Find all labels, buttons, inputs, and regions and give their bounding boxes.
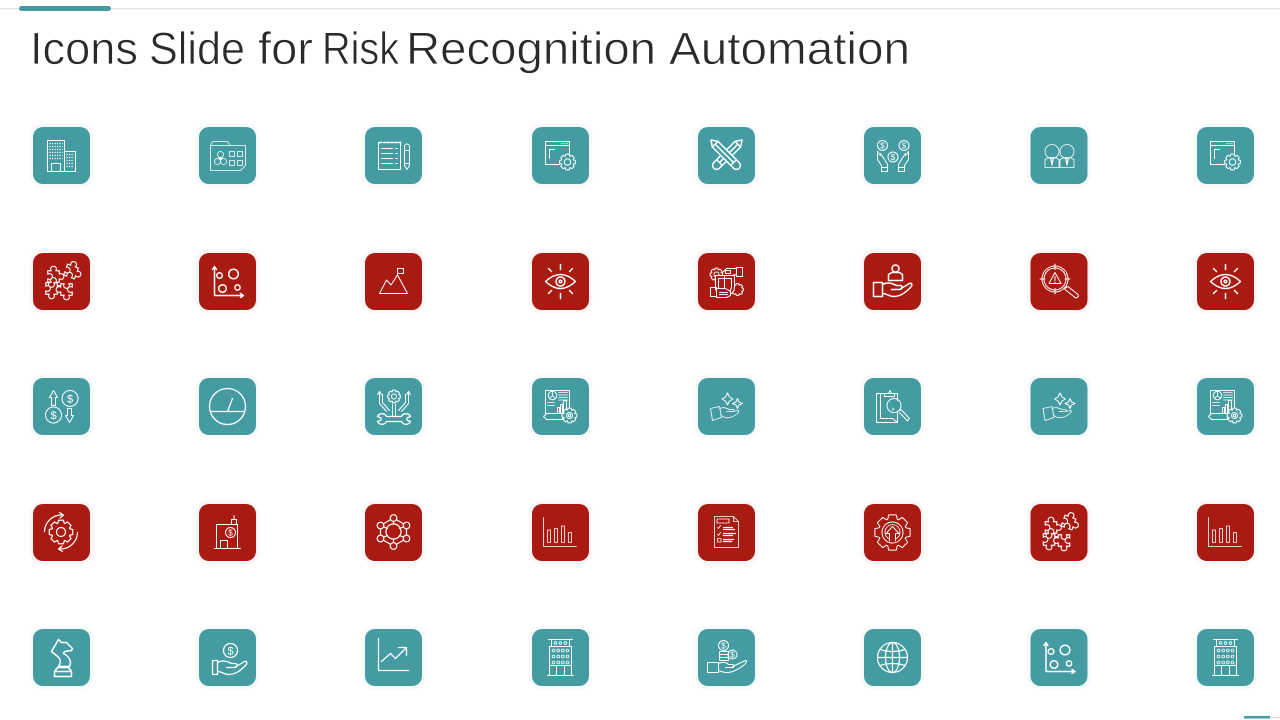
footer rule <box>1268 717 1280 718</box>
icon: shield with gears and hands <box>694 250 758 314</box>
icon: notepad and pencil <box>362 124 426 188</box>
title: Recognition <box>406 23 656 74</box>
icon: eye with rays <box>1194 250 1258 314</box>
icon: office tower <box>528 626 592 690</box>
icon: hand holding coin <box>196 626 260 690</box>
icon: bank building with dollar: $ <box>228 528 233 538</box>
icon: hand with coins: $ <box>730 650 735 660</box>
icon: dollar coins with up and down arrows: $ <box>67 394 73 406</box>
icon: crossed pencils <box>694 124 758 188</box>
icon: gear with upload arrow <box>860 500 924 564</box>
icon: network hexagon <box>362 500 426 564</box>
icon: browser window with gear <box>528 124 592 188</box>
icon: rising line chart <box>362 626 426 690</box>
icon: hands catching coins <box>860 124 924 188</box>
icon: gauge <box>196 374 260 438</box>
icon: office buildings <box>30 124 94 188</box>
header rule <box>0 8 1280 10</box>
icon: hands catching coins: $ <box>891 153 896 162</box>
icon: globe <box>860 626 924 690</box>
icon: bar chart <box>1194 500 1258 564</box>
icon: report with pencil and gear <box>528 374 592 438</box>
title: Risk <box>322 23 399 74</box>
icon: chess knight <box>30 626 94 690</box>
icon: dollar coins with up and down arrows: $ <box>50 410 57 422</box>
icon: office tower <box>1194 626 1258 690</box>
icon: hand with coins <box>694 626 758 690</box>
title: Icons <box>30 23 138 74</box>
icon: magnifier with warning <box>1027 250 1091 314</box>
icon: two people <box>1027 124 1091 188</box>
icon: bar chart <box>528 500 592 564</box>
icon: gear, arrows and wrench <box>362 374 426 438</box>
icon: hand with sparkles <box>1027 374 1091 438</box>
title: Automation <box>669 23 910 74</box>
icon: gear with rotating arrows <box>30 500 94 564</box>
title: Slide <box>149 23 245 74</box>
icon: folder with people <box>196 124 260 188</box>
icon: hand holding person <box>860 250 924 314</box>
icon: hand holding coin: $ <box>227 646 234 658</box>
icon: puzzle pieces <box>1027 500 1091 564</box>
icon: puzzle pieces <box>30 250 94 314</box>
icon: mountain with flag <box>362 250 426 314</box>
icon: bank building with dollar <box>196 500 260 564</box>
icon: hands catching coins: $ <box>902 142 907 150</box>
icon: eye with rays <box>528 250 592 314</box>
icon: hands catching coins: $ <box>880 142 885 150</box>
footer accent bar <box>1244 716 1270 718</box>
icon: checklist document <box>694 500 758 564</box>
header accent bar <box>19 6 111 11</box>
title: for <box>258 23 313 74</box>
icon: hand with coins: $ <box>721 642 726 650</box>
icon: scatter plot <box>1027 626 1091 690</box>
icon: scatter plot <box>196 250 260 314</box>
icon: browser window with gear <box>1194 124 1258 188</box>
title <box>30 23 910 74</box>
icon: clipboard with magnifier <box>860 374 924 438</box>
icon: hand with sparkles <box>694 374 758 438</box>
icon: dollar coins with up and down arrows <box>30 374 94 438</box>
icon: report with pencil and gear <box>1194 374 1258 438</box>
